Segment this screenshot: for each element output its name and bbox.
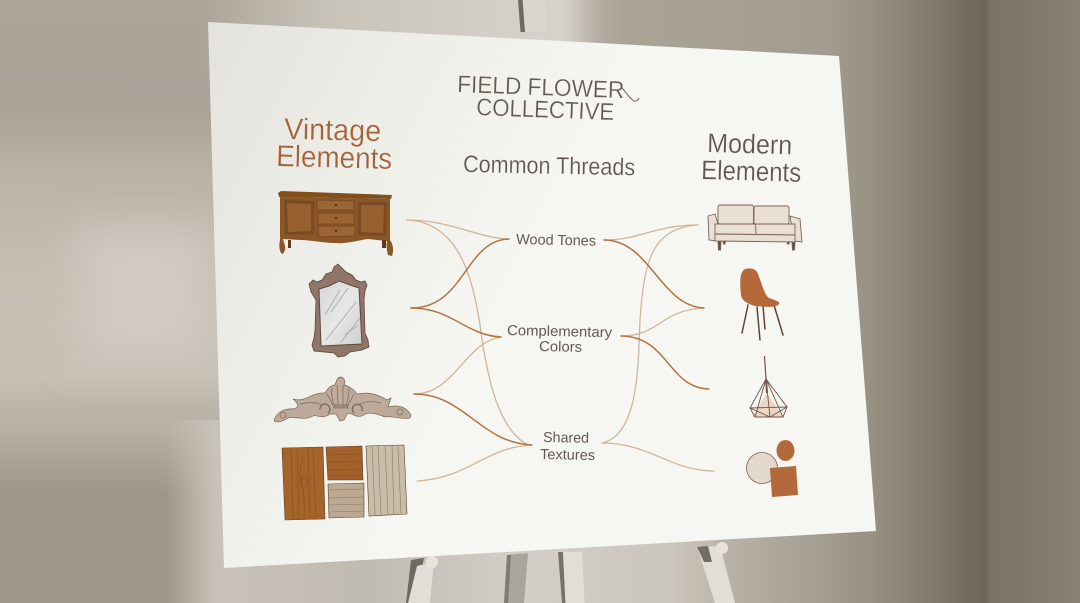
title: COLLECTIVE bbox=[476, 94, 615, 126]
label: shared textures: Textures bbox=[540, 447, 595, 464]
heading: common threads: Common Threads bbox=[463, 151, 635, 181]
icon: abstract shapes bbox=[746, 440, 798, 497]
heading: vintage elements: Elements bbox=[276, 140, 393, 176]
board panel bbox=[208, 22, 876, 568]
heading: vintage elements: Vintage bbox=[284, 113, 382, 148]
label: shared textures: Shared bbox=[543, 430, 589, 447]
labels: common threads bbox=[507, 232, 613, 464]
icon: sofa bbox=[708, 205, 802, 250]
icon: carved ornament bbox=[274, 377, 411, 422]
heading: modern elements bbox=[701, 128, 802, 188]
label: complementary colors bbox=[507, 323, 613, 356]
label: wood tones: Wood Tones bbox=[516, 232, 596, 250]
icon: sideboard bbox=[278, 191, 393, 256]
icon: wood samples bbox=[282, 445, 407, 520]
icon: pendant lamp bbox=[750, 356, 787, 417]
label: complementary colors: Complementary bbox=[507, 323, 613, 341]
label: complementary colors: Colors bbox=[539, 339, 582, 356]
heading: modern elements: Elements bbox=[701, 155, 802, 188]
heading: modern elements: Modern bbox=[707, 128, 793, 160]
icon: chair bbox=[740, 268, 783, 340]
heading: vintage elements bbox=[276, 113, 393, 176]
icon: ornate mirror bbox=[309, 264, 369, 357]
title bbox=[457, 71, 639, 126]
label: shared textures bbox=[540, 430, 595, 464]
easel mast bbox=[518, 0, 546, 32]
title: FIELD FLOWER bbox=[457, 71, 625, 104]
connector curves bbox=[407, 220, 714, 481]
easel legs and pegs bbox=[406, 542, 735, 603]
